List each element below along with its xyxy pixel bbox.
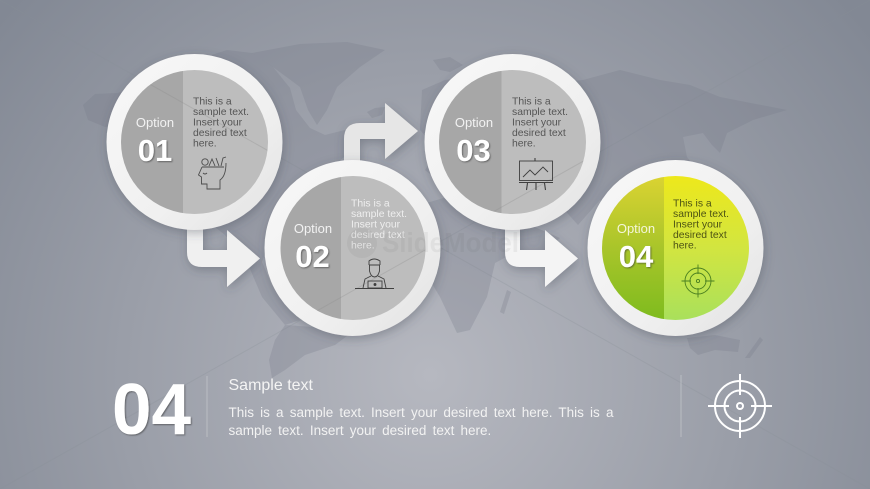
big number: 04: [112, 370, 191, 450]
arrow: 03 to 04: [505, 222, 578, 287]
disc 01: [121, 70, 268, 214]
text 02: sample text.: [351, 209, 407, 220]
description: This is a sample text. Insert your desired text here. This is a: [228, 405, 614, 420]
icon: target small: [682, 264, 714, 298]
text 03: This is a: [512, 96, 551, 108]
map: madagascar: [500, 290, 511, 314]
text 02: This is a: [351, 198, 390, 210]
text 02: Insert your: [351, 220, 401, 230]
description: sample text. Insert your desired text here.: [228, 423, 491, 438]
number 01: 01: [138, 133, 172, 168]
label 02: Option: [294, 221, 332, 236]
option 04: [588, 160, 764, 336]
icon: presentation board: [519, 158, 553, 190]
number 03: 03: [456, 133, 491, 168]
ring 01: [106, 54, 282, 230]
map: new zealand: [745, 337, 763, 358]
watermark text: SlideModel: [382, 227, 519, 258]
icon: person at laptop: [355, 259, 394, 288]
divider left: [206, 376, 208, 437]
text 03: here.: [512, 138, 536, 150]
divider right: [680, 375, 682, 437]
watermark: [347, 227, 519, 258]
option 01: [104, 54, 286, 239]
text 04: sample text.: [673, 209, 729, 220]
label 03: Option: [455, 115, 493, 130]
arrow: 01 to 02: [187, 222, 260, 287]
map: north america: [83, 50, 352, 325]
text 01: here.: [193, 138, 217, 150]
ring 03: [424, 54, 600, 230]
arrow: 02 to 03: [344, 103, 418, 170]
text 03: desired text: [512, 128, 566, 139]
text 04: This is a: [673, 198, 712, 210]
map: greenland: [252, 42, 385, 125]
ring 04: [588, 160, 764, 336]
text 03: sample text.: [512, 107, 568, 118]
text 04: Insert your: [673, 220, 723, 230]
watermark logo: [347, 228, 377, 258]
text 04: desired text: [673, 230, 727, 241]
heading: Sample text: [228, 377, 314, 394]
disc 02: [280, 176, 426, 320]
text 01: sample text.: [193, 107, 249, 118]
text 03: Insert your: [512, 118, 562, 128]
text 02: here.: [351, 240, 375, 252]
disc 04: [601, 174, 752, 322]
icon: target large: [708, 374, 772, 438]
map: australia: [687, 335, 740, 355]
label 01: Option: [136, 115, 174, 130]
map: eurasia: [420, 70, 787, 225]
ring 02: [264, 160, 440, 336]
text 01: desired text: [193, 128, 247, 139]
map: south america: [269, 325, 355, 378]
option 03: [422, 54, 604, 239]
text 01: Insert your: [193, 118, 243, 128]
text 02: desired text: [351, 230, 405, 241]
map: africa: [410, 190, 560, 333]
number 02: 02: [295, 239, 330, 274]
option 02: [262, 157, 445, 343]
text 04: here.: [673, 240, 697, 252]
number 04: 04: [619, 239, 654, 274]
map: arctic islands: [433, 57, 463, 72]
map: iceland: [367, 107, 385, 118]
text 01: This is a: [193, 96, 232, 108]
world map: [83, 42, 787, 378]
label 04: Option: [617, 221, 655, 236]
icon: head with ideas: [198, 157, 226, 189]
disc 03: [439, 70, 586, 214]
